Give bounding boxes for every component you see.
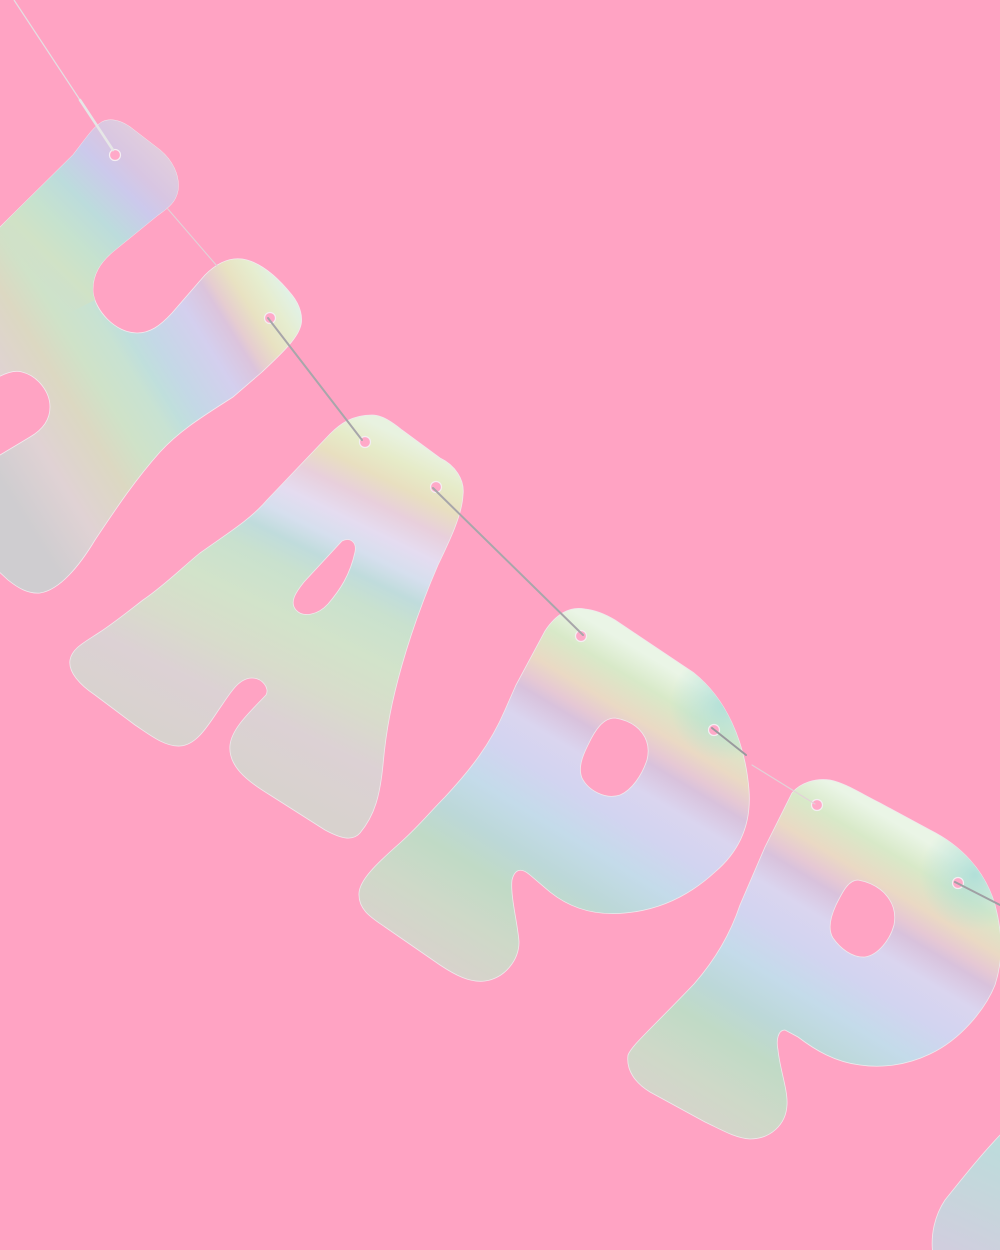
letter P second <box>628 780 1000 1139</box>
string segments threaded through the holes <box>80 100 1000 905</box>
letter A <box>70 415 463 838</box>
letter P first <box>359 608 749 981</box>
next letter corner <box>932 1130 1000 1250</box>
string: upper left segment <box>14 0 80 100</box>
letter H <box>0 120 302 593</box>
